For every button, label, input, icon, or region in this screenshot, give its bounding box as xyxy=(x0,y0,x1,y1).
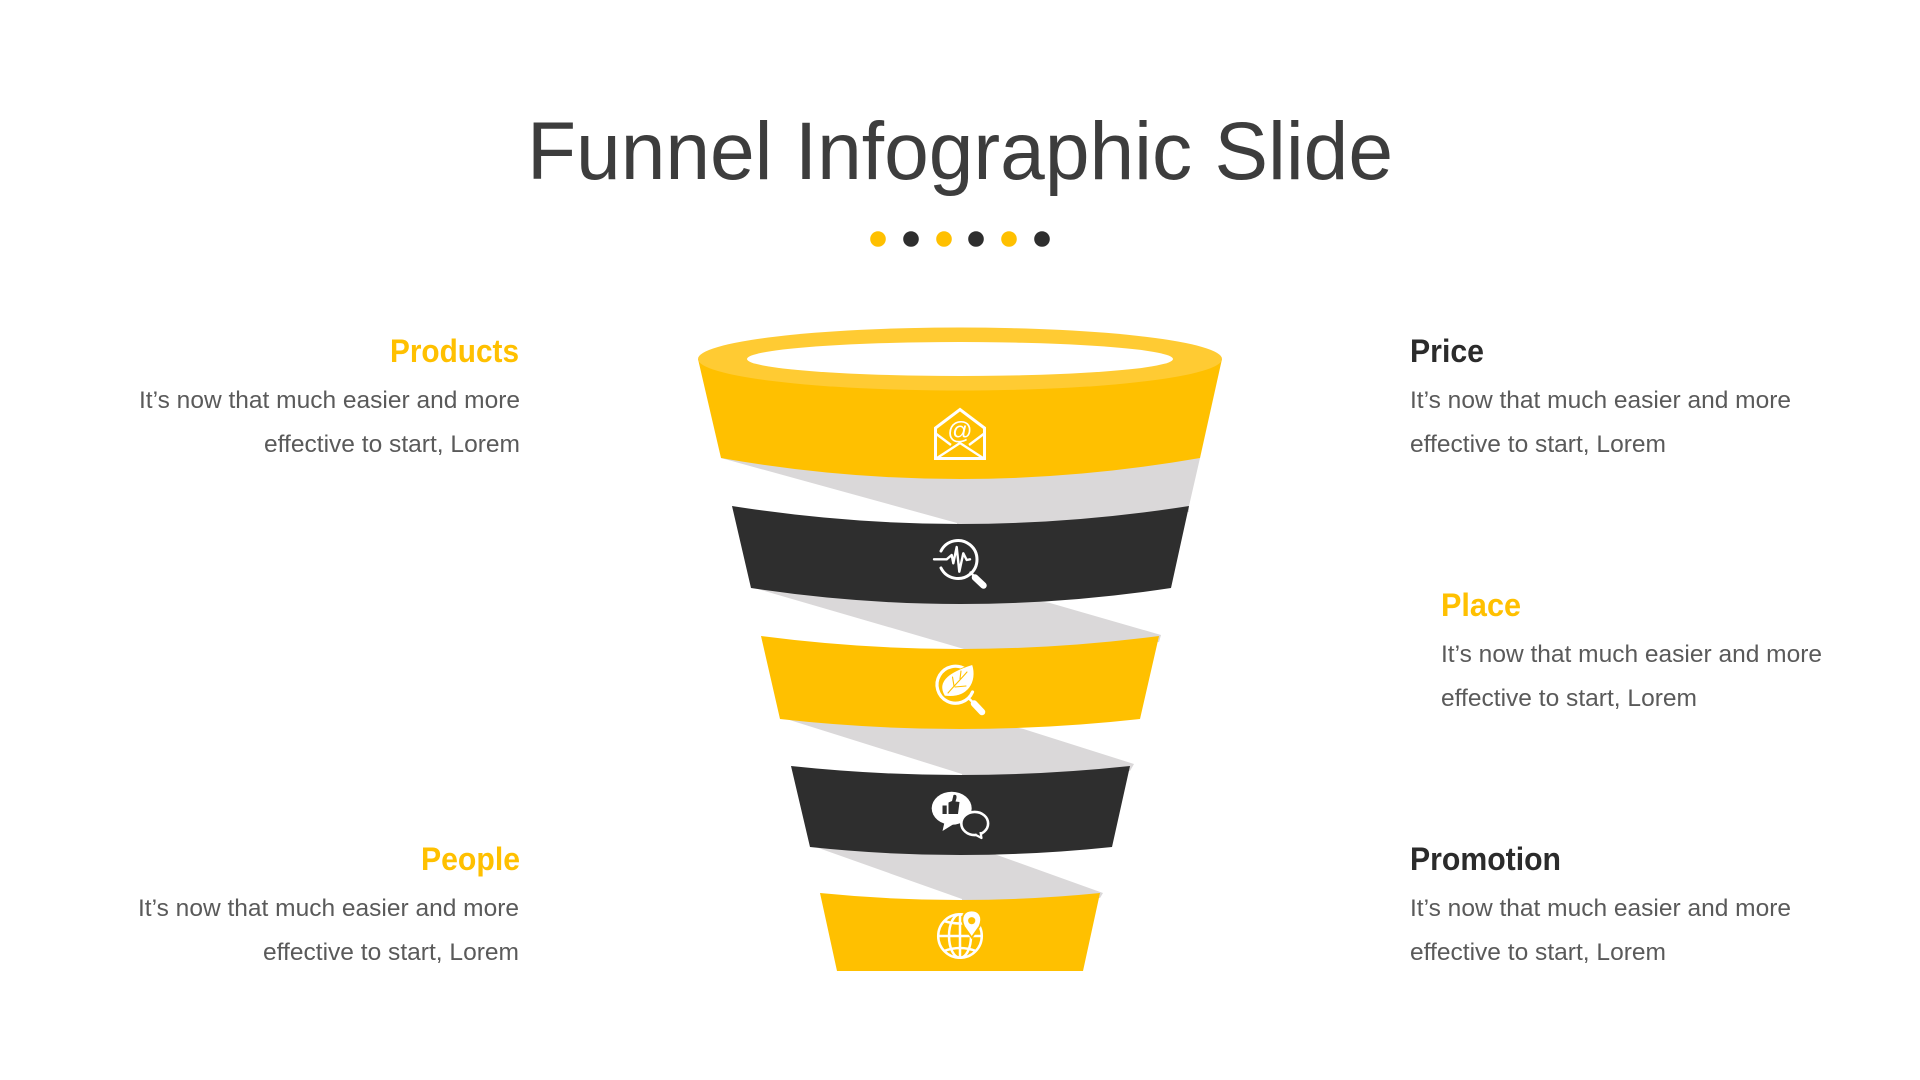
text block: Products: Products xyxy=(390,333,519,369)
icon: envelope with at sign xyxy=(935,410,985,459)
text block: Products: It’s now that much easier and more xyxy=(139,387,520,414)
text block: People: It’s now that much easier and more xyxy=(138,895,519,922)
text block: Price: Price xyxy=(1410,333,1484,369)
funnel rim xyxy=(698,328,1222,390)
text block: Place: effective to start, Lorem xyxy=(1441,685,1697,712)
text block: Place xyxy=(1441,587,1822,712)
icon: envelope with at sign: @ xyxy=(947,417,973,445)
grey connector shadows xyxy=(721,440,1200,905)
text block: People: People xyxy=(421,841,520,877)
band 3 yellow xyxy=(761,636,1159,729)
icon: pulse magnifier xyxy=(934,541,984,586)
icon: leaf magnifier xyxy=(937,664,982,712)
text block: People: effective to start, Lorem xyxy=(263,939,519,966)
dot row divider xyxy=(870,231,1050,247)
text block: Products xyxy=(139,333,520,458)
text block: Products: effective to start, Lorem xyxy=(264,431,520,458)
funnel opening xyxy=(747,342,1173,376)
text block: Price: effective to start, Lorem xyxy=(1410,431,1666,458)
text block: Place: It’s now that much easier and more xyxy=(1441,641,1822,668)
text block: Price: It’s now that much easier and more xyxy=(1410,387,1791,414)
band 4 dark xyxy=(791,766,1130,855)
text block: Price xyxy=(1410,333,1791,458)
text block: Promotion xyxy=(1410,841,1791,966)
band 1 yellow xyxy=(698,359,1222,479)
title: Funnel Infographic Slide xyxy=(527,106,1393,197)
text block: Promotion: effective to start, Lorem xyxy=(1410,939,1666,966)
band 5 yellow xyxy=(820,893,1100,971)
icon: chat bubbles with thumbs up xyxy=(932,792,988,838)
band 2 dark xyxy=(732,506,1189,604)
icon: globe with location pin xyxy=(938,910,982,958)
text block: Promotion: It’s now that much easier and more xyxy=(1410,895,1791,922)
funnel xyxy=(698,328,1222,971)
text block: Place: Place xyxy=(1441,587,1521,623)
text block: People xyxy=(138,841,520,966)
text block: Promotion: Promotion xyxy=(1410,841,1561,877)
